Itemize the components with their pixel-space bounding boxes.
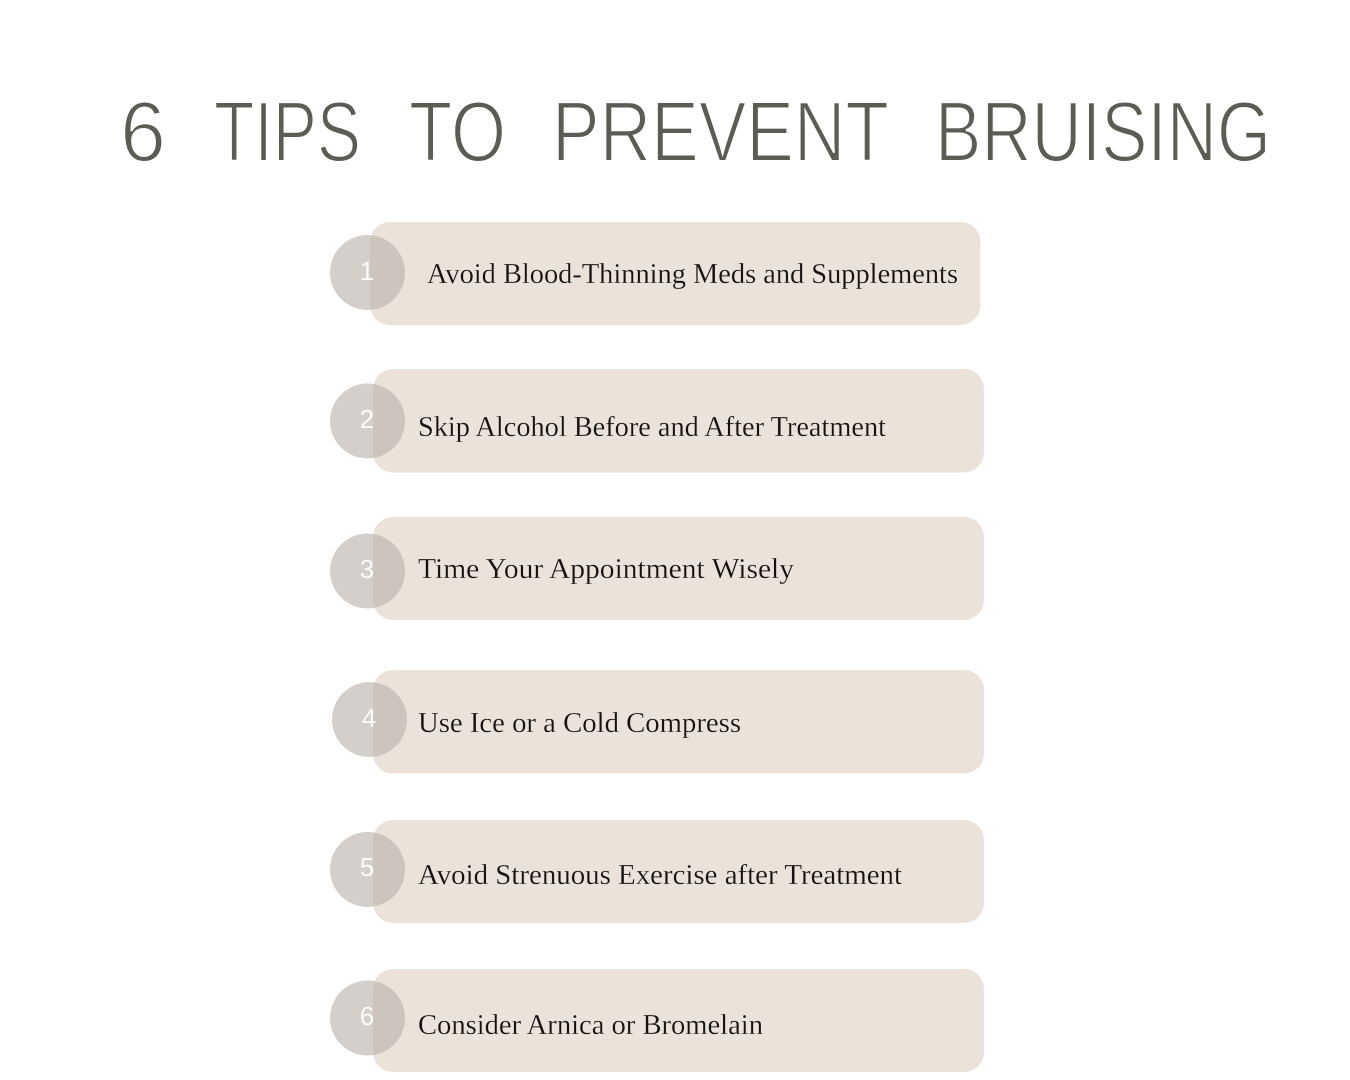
panel: tip 4 [332,670,984,774]
title: 6 [120,85,166,180]
panel: tip 6: 6 [360,1001,374,1031]
panel: tip 6: Consider Arnica or Bromelain [418,1010,763,1041]
panel: tip 5 [330,820,984,923]
title: BRUISING [935,85,1271,180]
panel: tip 3 [330,517,984,620]
panel: tip 3: 3 [360,554,374,584]
panel: tip 2: 2 [360,404,374,434]
panel: tip 3: Time Your Appointment Wisely [418,554,794,585]
title [120,85,1271,180]
title: PREVENT [552,85,889,180]
panel: tip 6 [330,969,984,1072]
panel: tip 5: 5 [360,852,374,882]
title: TIPS [214,85,361,180]
panel: tip 1 [330,222,980,325]
panel: tip 2 [330,369,984,472]
panel: tip 5: Avoid Strenuous Exercise after Treatment [418,860,902,891]
panel: tip 1: Avoid Blood-Thinning Meds and Supplements [427,259,958,290]
panel: tip 2: Skip Alcohol Before and After Treatment [418,412,886,443]
panel: tip 1: 1 [360,256,374,286]
title: TO [409,85,506,180]
panel: tip 4: Use Ice or a Cold Compress [418,708,741,739]
panel: tip 4: 4 [362,703,376,733]
